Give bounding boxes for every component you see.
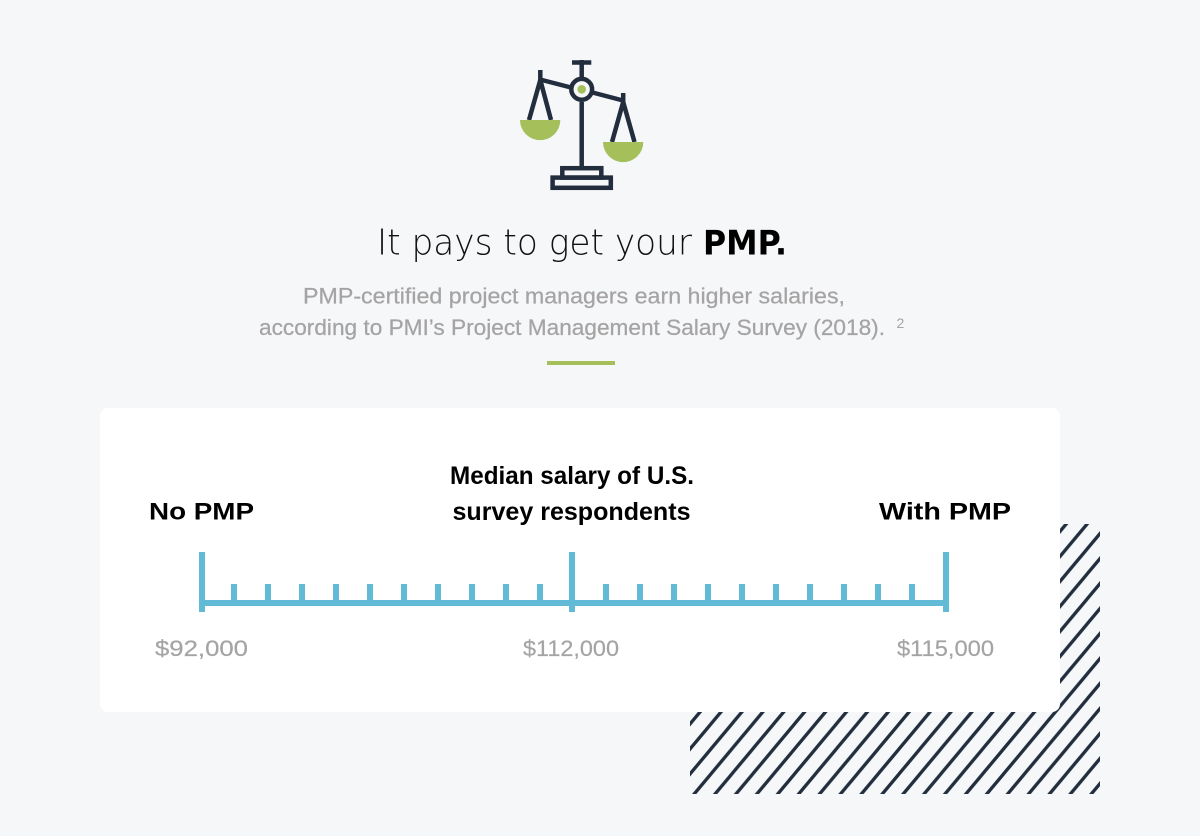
icon: balance scale xyxy=(520,60,643,188)
title: It pays to get your xyxy=(377,222,692,264)
accent rule xyxy=(547,361,615,365)
hatched panel xyxy=(690,524,1100,794)
subtitle: 2 xyxy=(896,315,904,331)
label: with PMP: With PMP xyxy=(879,498,1011,526)
subtitle: PMP-certified project managers earn higher salaries, xyxy=(303,284,845,308)
title: PMP. xyxy=(703,224,787,264)
chart: salary scale xyxy=(199,552,949,612)
value: $92,000: $92,000 xyxy=(155,636,248,661)
value: $115,000: $115,000 xyxy=(897,636,994,661)
heading: median salary: survey respondents xyxy=(452,498,690,526)
heading: median salary xyxy=(450,462,694,526)
heading: median salary: Median salary of U.S. xyxy=(450,462,694,490)
label: no PMP: No PMP xyxy=(149,498,254,526)
panel: salary card xyxy=(100,408,1060,712)
value: $112,000: $112,000 xyxy=(523,636,619,661)
subtitle: according to PMI’s Project Management Salary Survey (2018). xyxy=(259,315,885,340)
subtitle xyxy=(259,284,904,340)
